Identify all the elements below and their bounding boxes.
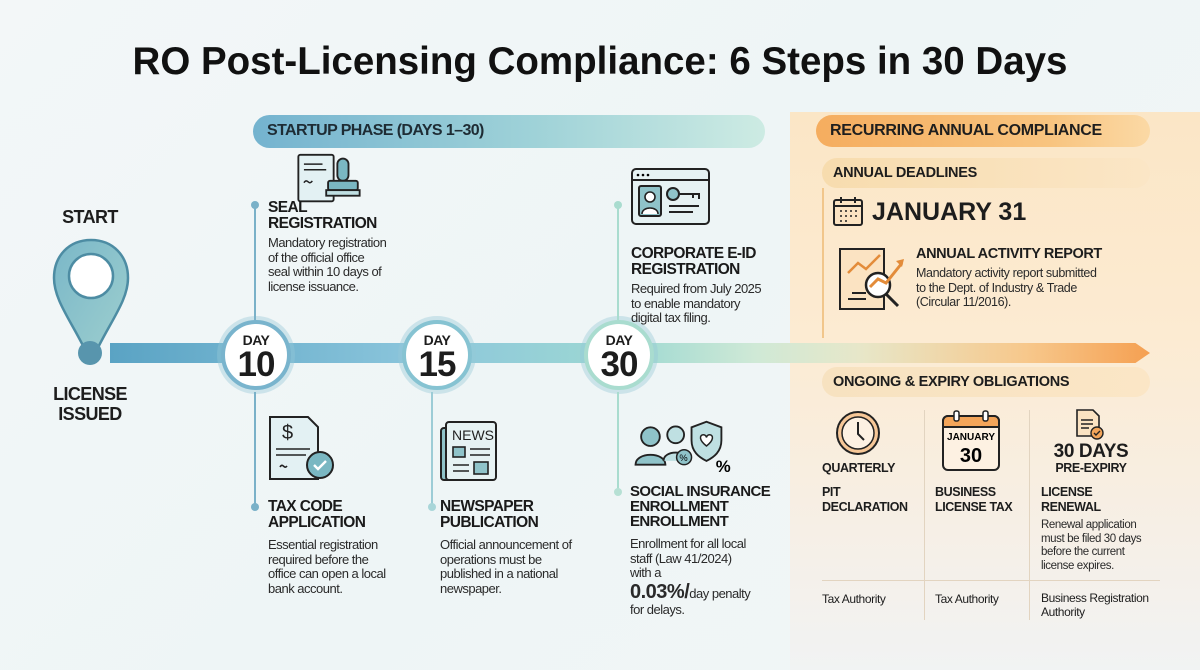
- icon: activity report: [839, 248, 904, 310]
- recurring pill: [816, 115, 1150, 147]
- step: social insurance enrollment: SOCIAL INSURANCE: [630, 483, 770, 500]
- step: social insurance enrollment: ENROLLMENT: [630, 498, 728, 515]
- step: social insurance enrollment: ENROLLMENT: [630, 513, 728, 530]
- day 30 marker: 30: [601, 345, 637, 384]
- license issued label: [53, 384, 127, 424]
- startup phase pill: STARTUP PHASE (DAYS 1–30): [267, 122, 484, 139]
- icon: renewal doc: [1076, 409, 1104, 440]
- january 31: JANUARY 31: [872, 198, 1026, 226]
- license issued label: ISSUED: [58, 404, 122, 424]
- annual deadlines pill: [822, 158, 1150, 188]
- step: corporate e-id: [631, 168, 762, 325]
- column: license renewal: [1041, 409, 1149, 618]
- step: newspaper publication: newspaper.: [440, 580, 502, 596]
- step: newspaper publication: PUBLICATION: [440, 514, 538, 531]
- start label: START: [62, 207, 118, 227]
- icon: people shield: [634, 420, 731, 474]
- column: license renewal: RENEWAL: [1041, 500, 1101, 514]
- annual deadlines section: ANNUAL ACTIVITY REPORT: [916, 246, 1102, 262]
- step: corporate e-id: digital tax filing.: [631, 310, 710, 325]
- icon: tax document: $: [282, 422, 293, 444]
- annual deadlines section: (Circular 11/2016).: [916, 295, 1011, 309]
- step: tax code application: Essential registration: [268, 537, 378, 552]
- step: newspaper publication: operations must be: [440, 552, 542, 566]
- step: tax code application: bank account.: [268, 580, 342, 596]
- annual deadlines section: to the Dept. of Industry & Trade: [916, 280, 1077, 294]
- column: business license tax: BUSINESS: [935, 485, 996, 499]
- column: PIT declaration: DECLARATION: [822, 500, 908, 514]
- day 10 marker: 10: [238, 345, 274, 384]
- step: social insurance enrollment: staff (Law 41/2024): [630, 550, 732, 566]
- icon: tax document: [269, 416, 334, 480]
- step: tax code application: required before the: [268, 552, 368, 566]
- step: seal registration: seal within 10 days of: [268, 264, 381, 279]
- ongoing pill: [822, 367, 1150, 397]
- step: tax code application: [268, 416, 386, 596]
- step: corporate e-id: Required from July 2025: [631, 281, 761, 296]
- column: business license tax: Tax Authority: [935, 592, 999, 606]
- step: corporate e-id: to enable mandatory: [631, 296, 740, 310]
- icon: location pin: [52, 238, 130, 365]
- step: tax code application: office can open a local: [268, 566, 386, 581]
- column: license renewal: Renewal application: [1041, 519, 1136, 531]
- step: newspaper publication: [440, 421, 572, 596]
- step: seal registration: of the official office: [268, 250, 364, 264]
- step: newspaper publication: NEWSPAPER: [440, 498, 533, 515]
- startup phase pill: [253, 115, 765, 148]
- step: tax code application: TAX CODE: [268, 498, 342, 515]
- step: corporate e-id: CORPORATE E-ID: [631, 245, 756, 262]
- annual deadlines section: [822, 158, 1102, 338]
- step: seal registration: REGISTRATION: [268, 215, 377, 232]
- day 15 marker: 15: [419, 345, 455, 384]
- step: social insurance enrollment: Enrollment for all local: [630, 536, 746, 551]
- column: license renewal: before the current: [1041, 546, 1125, 558]
- column: license renewal: LICENSE: [1041, 485, 1092, 499]
- title: RO Post-Licensing Compliance: 6 Steps in 30 Days: [133, 40, 1067, 83]
- step: corporate e-id: REGISTRATION: [631, 261, 740, 278]
- day 30 marker: [584, 320, 654, 390]
- step: social insurance enrollment: 0.03%/day penalty: [630, 580, 750, 602]
- column: license renewal: PRE-EXPIRY: [1055, 461, 1127, 475]
- step: seal registration: [268, 154, 386, 294]
- icon: newspaper: [440, 421, 497, 481]
- column: PIT declaration: PIT: [822, 485, 840, 499]
- icon: clock: [836, 411, 880, 455]
- icon: e-id card: [631, 168, 710, 225]
- step: seal registration: license issuance.: [268, 278, 358, 294]
- icon: people shield: %: [679, 453, 688, 463]
- recurring pill: RECURRING ANNUAL COMPLIANCE: [830, 122, 1102, 139]
- timeline arrow: [110, 343, 1150, 363]
- day 15 marker: [402, 320, 472, 390]
- step: newspaper publication: published in a national: [440, 566, 558, 581]
- icon: newspaper: NEWS: [452, 427, 494, 443]
- icon: calendar: [833, 197, 863, 226]
- day 10 marker: [221, 320, 291, 390]
- column: license renewal: Business Registration: [1041, 591, 1149, 605]
- column: license renewal: 30 DAYS: [1054, 441, 1128, 462]
- icon: calendar jan 30: [942, 410, 1000, 471]
- icon: calendar jan 30: JANUARY: [947, 432, 995, 443]
- ongoing pill: ONGOING & EXPIRY OBLIGATIONS: [833, 374, 1069, 390]
- day 10 marker: DAY: [243, 332, 269, 348]
- column: license renewal: Authority: [1041, 604, 1085, 618]
- icon: seal stamp: [297, 154, 361, 202]
- step: social insurance enrollment: with a: [630, 565, 661, 580]
- annual deadlines section: Mandatory activity report submitted: [916, 266, 1097, 280]
- column: business license tax: [935, 410, 1012, 606]
- step: social insurance enrollment: [630, 420, 770, 616]
- connectors: [254, 205, 256, 320]
- license issued label: LICENSE: [53, 384, 127, 404]
- icon: calendar jan 30: 30: [960, 445, 982, 467]
- dividers: [924, 410, 925, 620]
- column: license renewal: must be filed 30 days: [1041, 532, 1141, 544]
- step: seal registration: Mandatory registration: [268, 235, 386, 250]
- day 15 marker: DAY: [424, 332, 450, 348]
- column: PIT declaration: Tax Authority: [822, 592, 886, 606]
- column: PIT declaration: [822, 411, 908, 606]
- step: tax code application: APPLICATION: [268, 514, 365, 531]
- step: seal registration: SEAL: [268, 199, 307, 216]
- day 30 marker: DAY: [606, 332, 632, 348]
- column: PIT declaration: QUARTERLY: [822, 461, 895, 475]
- annual deadlines pill: ANNUAL DEADLINES: [833, 165, 977, 181]
- column: license renewal: license expires.: [1041, 560, 1114, 572]
- column: business license tax: LICENSE TAX: [935, 500, 1012, 514]
- step: newspaper publication: Official announcement of: [440, 537, 572, 552]
- step: social insurance enrollment: for delays.: [630, 602, 684, 616]
- right panel background: [790, 112, 1200, 670]
